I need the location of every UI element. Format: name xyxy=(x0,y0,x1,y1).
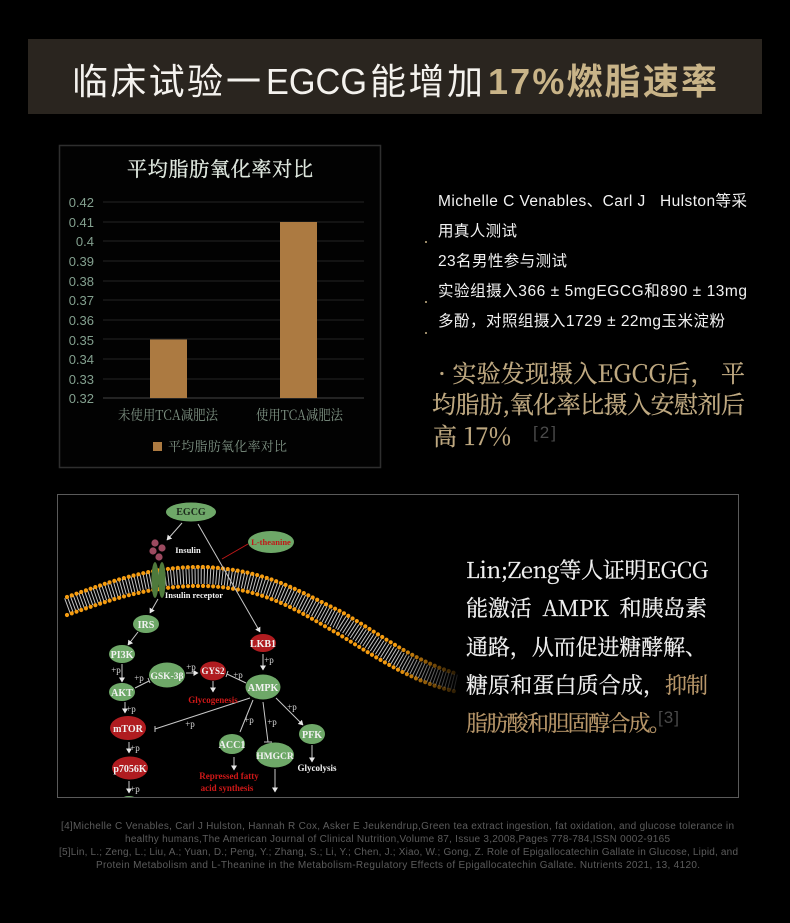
legend: 平均脂肪氧化率对比 xyxy=(168,436,287,455)
references footnote: healthy humans,The American Journal of Clinical Nutrition,Volume 87, Issue 3,2008,Pages 778-784,ISSN 0002-9165 xyxy=(125,834,670,845)
references footnote: [5]Lin, L.; Zeng, L.; Liu, A.; Yuan, D.; Peng, Y.; Zhang, S.; Li, Y.; Chen, J.; Xiao, W.; Gong, Z. Role of Epigallocatechin Gallate in Glucose, Lipid, and xyxy=(59,847,738,858)
node labels: LKB1 xyxy=(250,639,276,650)
title gold text: 17%燃脂速率 xyxy=(488,61,717,102)
phosphorylation marks: +p xyxy=(185,719,195,729)
title white text: 临床试验 xyxy=(72,61,223,102)
node labels: Repressed fatty xyxy=(199,771,259,781)
node labels: IRS xyxy=(138,620,155,631)
node labels: Insulin xyxy=(175,545,201,555)
node labels: mTOR xyxy=(113,724,144,735)
citation 2: [2] xyxy=(533,423,556,442)
AMPK explanation text xyxy=(466,554,709,738)
gridlines and y axis: 0.42 xyxy=(69,195,94,210)
references footnote xyxy=(59,821,738,871)
bar: with TCA xyxy=(280,222,317,398)
node labels: EGCG xyxy=(176,507,206,518)
phosphorylation marks: +p xyxy=(244,715,254,725)
references footnote: [4]Michelle C Venables, Carl J Hulston, Hannah R Cox, Asker E Jeukendrup,Green tea extract ingestion, fat oxidation, and glucose tolerance in xyxy=(61,821,734,832)
node labels: AKT xyxy=(111,688,133,699)
panel: bar chart xyxy=(60,146,380,468)
gold finding text: 均脂肪,氧化率比摄入安慰剂后 xyxy=(432,385,745,420)
title white text: 能增加 xyxy=(370,61,483,102)
phosphorylation marks: +p xyxy=(111,665,121,675)
study description text: 23名男性参与测试 xyxy=(438,252,567,270)
node labels: Insulin receptor xyxy=(165,590,223,600)
node labels: acid synthesis xyxy=(201,783,254,793)
phosphorylation marks: +p xyxy=(134,673,144,683)
title banner xyxy=(28,39,762,114)
phosphorylation marks: +p xyxy=(287,702,297,712)
citation 3: [3] xyxy=(658,708,679,727)
node labels: Glycogenesis xyxy=(188,695,238,705)
references footnote: Protein Metabolism and L-Theanine in the Metabolism-Regulatory Effects of Epigallocatechin Gallate. Nutrients 2021, 13, 4120. xyxy=(96,860,700,871)
gridlines and y axis: 0.39 xyxy=(69,254,94,269)
node labels: GSK-3β xyxy=(151,672,183,682)
node labels: PFK xyxy=(302,730,322,741)
arrows and connectors xyxy=(122,523,312,793)
node labels: AMPK xyxy=(248,683,278,694)
cell membrane xyxy=(67,567,458,692)
highlighted conclusion: 脂肪酸和胆固醇合成。 xyxy=(466,707,671,738)
phosphorylation marks: +p xyxy=(126,704,136,714)
panel: EGCG pathway diagram xyxy=(58,494,738,810)
study description text: 多酚，对照组摄入1729 ± 22mg玉米淀粉 xyxy=(438,312,725,330)
phosphorylation marks xyxy=(111,655,297,794)
gridlines and y axis: 0.37 xyxy=(69,293,94,308)
node labels: GYS2 xyxy=(201,666,225,676)
phosphorylation marks: +p xyxy=(267,717,277,727)
AMPK explanation text: 通路，从而促进糖酵解、 xyxy=(466,631,707,662)
highlighted conclusion: 抑制 xyxy=(665,669,708,700)
gold finding text xyxy=(432,354,745,452)
red nodes xyxy=(110,634,276,780)
study description text: Michelle C Venables、Carl J Hulston等采 xyxy=(438,192,747,210)
category label 2: 使用TCA减肥法 xyxy=(256,405,344,425)
gridlines and y axis: 0.41 xyxy=(69,215,94,230)
node labels: Glycolysis xyxy=(297,763,337,773)
AMPK explanation text: Lin;Zeng等人证明EGCG xyxy=(466,554,709,585)
study description text: 实验组摄入366 ± 5mgEGCG和890 ± 13mg xyxy=(438,282,747,300)
node labels xyxy=(111,507,337,793)
chart title: 平均脂肪氧化率对比 xyxy=(127,153,313,182)
node labels: L-theanine xyxy=(251,537,291,547)
study description text: 用真人测试 xyxy=(438,222,517,240)
study description text xyxy=(425,192,747,334)
bar: without TCA xyxy=(150,340,187,398)
gridlines and y axis: 0.32 xyxy=(69,391,94,406)
phosphorylation marks: +p xyxy=(130,784,140,794)
title white text xyxy=(72,61,483,102)
gridlines and y axis: 0.4 xyxy=(76,234,94,249)
AMPK explanation text: 能激活 AMPK 和胰岛素 xyxy=(466,592,707,623)
node labels: ACC1 xyxy=(219,740,245,751)
AMPK explanation text: 糖原和蛋白质合成， xyxy=(466,669,665,700)
phosphorylation marks: +p xyxy=(233,670,243,680)
gridlines and y axis xyxy=(69,195,364,406)
insulin molecules xyxy=(149,539,166,561)
node labels: p7056K xyxy=(113,764,147,775)
gridlines and y axis: 0.38 xyxy=(69,274,94,289)
node labels: HMGCR xyxy=(256,752,294,762)
node labels: PI3K xyxy=(111,650,134,661)
phosphorylation marks: +p xyxy=(130,743,140,753)
category label 1: 未使用TCA减肥法 xyxy=(118,405,219,425)
phosphorylation marks: +p xyxy=(264,655,274,665)
gold finding text: · 实验发现摄入EGCG后， 平 xyxy=(438,354,745,389)
phosphorylation marks: +p xyxy=(186,662,196,672)
gridlines and y axis: 0.34 xyxy=(69,352,94,367)
title white text: 一 xyxy=(226,61,261,102)
green nodes xyxy=(109,502,325,810)
highlighted conclusion xyxy=(466,669,708,738)
title white text: EGCG xyxy=(266,61,367,102)
gridlines and y axis: 0.35 xyxy=(69,333,94,348)
gridlines and y axis: 0.36 xyxy=(69,313,94,328)
insulin receptor xyxy=(151,562,166,598)
gold finding text: 高 17% xyxy=(433,417,511,452)
gridlines and y axis: 0.33 xyxy=(69,372,94,387)
